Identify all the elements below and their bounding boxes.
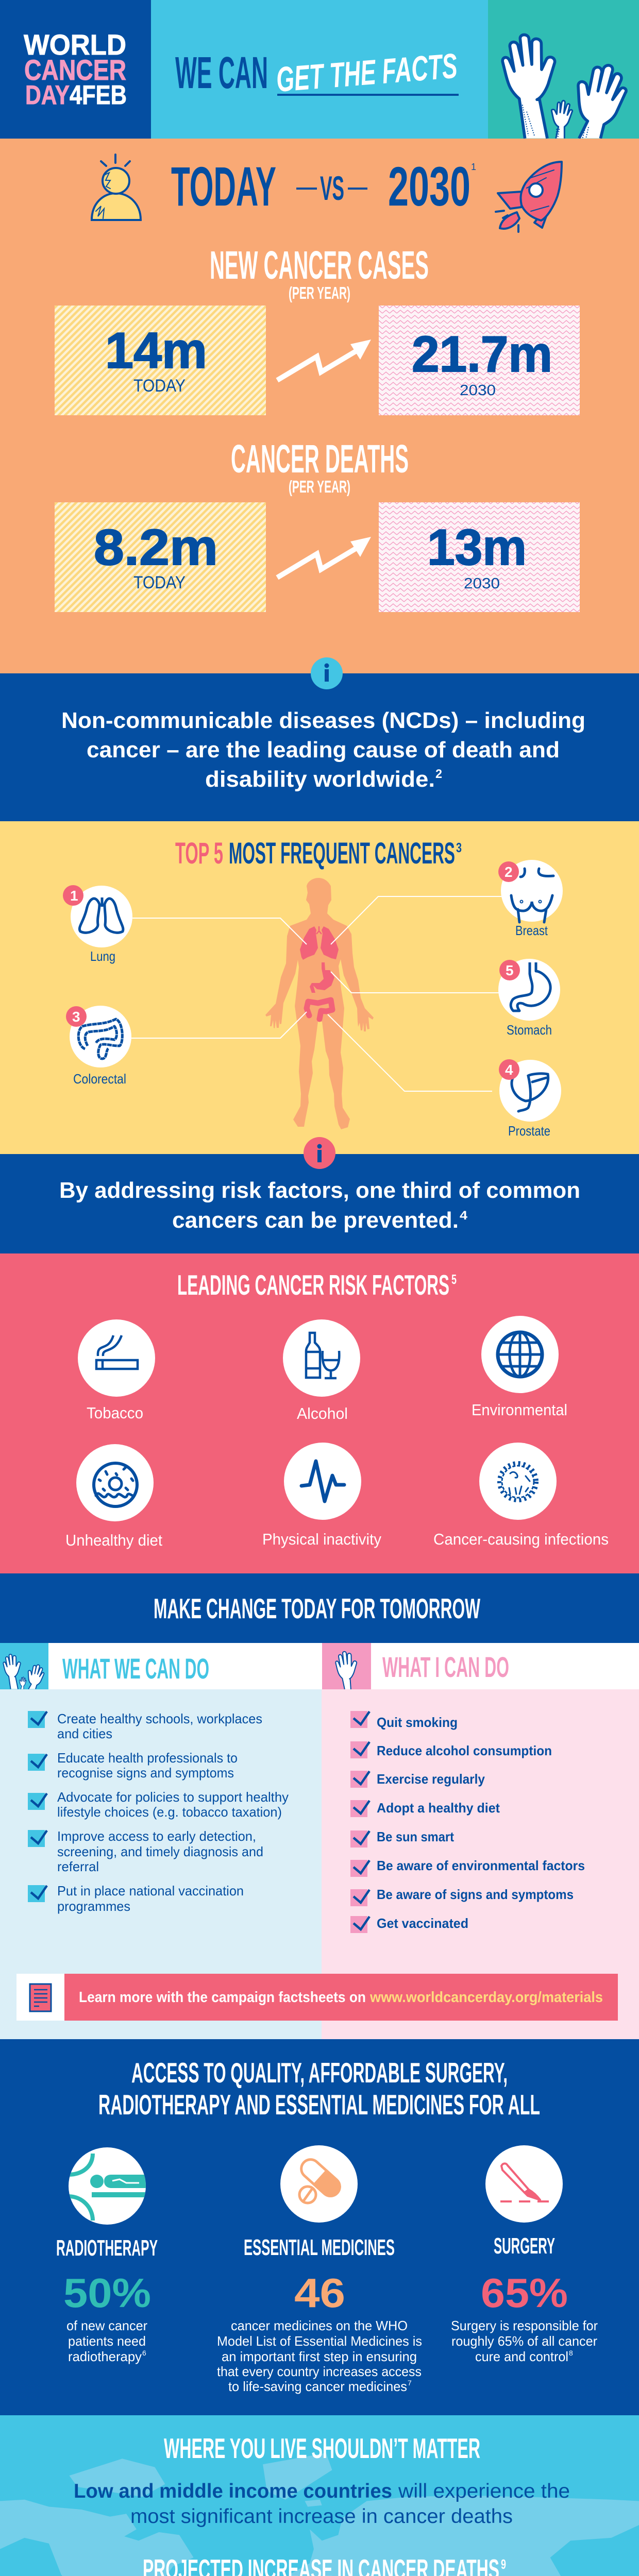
checklist: what I can do: Quit smoking	[377, 1715, 458, 1730]
item: colorectal: Colorectal	[73, 1071, 126, 1087]
icon: hand	[335, 1652, 357, 1689]
stat box: 13m 2030	[379, 502, 580, 612]
item: stomach: 5	[506, 962, 514, 978]
checklist: what we can do: recognise signs and symptoms	[57, 1765, 234, 1781]
stat box: 14m today: TODAY	[133, 376, 186, 396]
stat box: 21.7m 2030	[379, 306, 580, 415]
icon: person	[92, 155, 141, 220]
heading: today vs 2030: VS	[320, 169, 344, 207]
item: unhealthy diet: Unhealthy diet	[65, 1531, 162, 1549]
checklist: what we can do: Improve access to early detection,	[57, 1828, 256, 1844]
column: essential medicines: Model List of Essential Medicines is	[217, 2333, 422, 2349]
heading: new cancer cases: (PER YEAR)	[289, 283, 350, 302]
item: lung: 1	[70, 888, 78, 904]
icon: hands	[3, 1654, 44, 1689]
campaign slogan: GET THE FACTS	[275, 46, 459, 99]
column: surgery: 65%	[481, 2270, 568, 2316]
text: low and middle income countries: will experience the	[398, 2480, 570, 2502]
checklist: what I can do: Be aware of environmental factors	[377, 1858, 585, 1873]
item: environmental: Environmental	[472, 1401, 567, 1419]
panel: make change heading	[0, 1573, 639, 1643]
header banner	[0, 0, 639, 139]
heading: risk factors: 5	[451, 1272, 457, 1287]
panel: World Cancer Day logo: 4FEB	[70, 80, 127, 110]
column: essential medicines: ESSENTIAL MEDICINES	[244, 2235, 395, 2260]
column: radiotherapy: radiotherapy	[68, 2349, 142, 2364]
text: NCD statement: 2	[435, 767, 442, 781]
checklist: what we can do	[28, 1711, 289, 1914]
heading: access	[98, 2057, 540, 2121]
stat box: 13m 2030: 2030	[464, 575, 500, 592]
text: NCD statement: disability worldwide.	[205, 767, 435, 792]
arrow: cases rising	[277, 340, 371, 380]
item: colorectal	[66, 1006, 131, 1087]
checklist: what I can do: Exercise regularly	[377, 1771, 485, 1787]
column: surgery: 8	[569, 2349, 573, 2357]
column: radiotherapy: patients need	[68, 2333, 146, 2349]
heading: new cancer cases: NEW CANCER CASES	[210, 243, 429, 287]
body silhouette with organs	[131, 878, 501, 1129]
checklist: what I can do: Be sun smart	[377, 1829, 454, 1844]
stat box: 13m 2030: 13m	[427, 519, 527, 575]
item: stomach: Stomach	[507, 1022, 552, 1038]
column: surgery: cure and control	[475, 2349, 568, 2364]
item: prostate: 4	[505, 1062, 513, 1078]
campaign slogan	[175, 46, 459, 99]
heading: what I can do: WHAT I CAN DO	[382, 1651, 509, 1683]
icon: info	[311, 657, 343, 689]
arrow: deaths rising	[277, 537, 371, 578]
text: prevention statement: cancers can be prevented.	[172, 1208, 459, 1233]
campaign slogan: WE CAN	[175, 48, 268, 98]
checklist: what we can do: screening, and timely diagnosis and	[57, 1844, 263, 1859]
heading: what we can do: WHAT WE CAN DO	[62, 1652, 209, 1685]
checklist: what I can do: Reduce alcohol consumption	[377, 1743, 552, 1758]
column: essential medicines: that every country increases access	[217, 2364, 422, 2379]
heading: risk factors	[177, 1269, 457, 1301]
heading: top 5 most frequent cancers: MOST FREQUENT CANCERS	[229, 837, 455, 870]
column: essential medicines: to life-saving cancer medicines	[228, 2379, 407, 2394]
column: surgery	[451, 2145, 598, 2364]
text: low and middle income countries: most significant increase in cancer deaths	[130, 2505, 513, 2528]
panel: NCD fact	[0, 657, 639, 821]
stat box: 8.2m today: 8.2m	[94, 519, 218, 575]
panel: access to treatment	[0, 2039, 639, 2415]
panel: top 5 cancers	[0, 821, 639, 1154]
heading: today vs 2030	[171, 155, 476, 217]
item: physical inactivity: Physical inactivity	[262, 1530, 381, 1548]
checklist: what we can do: Create healthy schools, workplaces	[57, 1711, 262, 1726]
text: low and middle income countries: Low and middle income countries	[74, 2480, 392, 2502]
column: radiotherapy: of new cancer	[66, 2318, 147, 2333]
checklist: what I can do: Get vaccinated	[377, 1916, 468, 1931]
panel: World Cancer Day logo: WORLD	[24, 28, 126, 61]
callout: campaign factsheets: www.worldcancerday.org/materials	[369, 1989, 603, 2006]
panel: World Cancer Day logo: DAY	[25, 80, 70, 110]
column: surgery: SURGERY	[494, 2233, 555, 2259]
heading: today vs 2030: 1	[471, 162, 476, 172]
stat box: 21.7m 2030: 2030	[460, 382, 496, 399]
checklist: what we can do: lifestyle choices (e.g. tobacco taxation)	[57, 1804, 282, 1820]
column: radiotherapy: 50%	[63, 2270, 151, 2316]
item: alcohol: Alcohol	[297, 1404, 348, 1422]
panel: today vs 2030	[0, 139, 639, 673]
text: prevention statement	[59, 1178, 580, 1233]
item: alcohol	[283, 1319, 360, 1422]
heading: cancer deaths	[231, 437, 409, 496]
heading: today vs 2030: TODAY	[171, 155, 276, 217]
checklist: what we can do: Advocate for policies to support healthy	[57, 1789, 289, 1805]
heading: cancer deaths: CANCER DEATHS	[231, 437, 409, 481]
text: prevention statement: 4	[460, 1209, 468, 1223]
stat box: 8.2m today	[55, 502, 266, 612]
panel: raised hands illustration	[488, 0, 639, 139]
item: lung	[63, 885, 132, 964]
text: NCD statement	[61, 708, 585, 792]
column: essential medicines: an important first step in ensuring	[222, 2349, 417, 2364]
icon: document	[30, 1984, 51, 2011]
checklist: what I can do	[350, 1711, 585, 1933]
icon: info pink	[304, 1137, 335, 1169]
column: essential medicines: cancer medicines on the WHO	[231, 2318, 408, 2333]
column: radiotherapy: 6	[142, 2349, 146, 2357]
heading: today vs 2030: 2030	[388, 155, 470, 217]
text: prevention statement: By addressing risk factors, one third of common	[59, 1178, 580, 1203]
checklist: what we can do: Educate health professionals to	[57, 1750, 238, 1766]
item: lung: Lung	[90, 948, 115, 964]
item: physical inactivity	[262, 1443, 381, 1548]
heading: new cancer cases	[210, 243, 429, 302]
item: stomach	[498, 959, 560, 1038]
heading: top 5 most frequent cancers: 3	[456, 840, 462, 855]
callout: campaign factsheets: Learn more with the campaign factsheets on	[79, 1989, 366, 2006]
stat box: 8.2m today: TODAY	[133, 573, 186, 592]
item: tobacco	[78, 1319, 155, 1422]
callout: campaign factsheets	[16, 1974, 618, 2021]
panel: prevention fact	[0, 1137, 639, 1253]
column: surgery: roughly 65% of all cancer	[451, 2333, 597, 2349]
stat box: 14m today: 14m	[105, 322, 207, 379]
panel: leading risk factors	[0, 1253, 639, 1573]
item: cancer-causing infections: Cancer-causing infections	[433, 1530, 609, 1548]
checklist: what we can do: referral	[57, 1859, 99, 1874]
heading: projected increase: 9	[501, 2556, 506, 2572]
checklist: what we can do: Put in place national vaccination	[57, 1883, 244, 1899]
item: tobacco: Tobacco	[87, 1404, 143, 1422]
column: essential medicines	[217, 2145, 422, 2394]
column: surgery: Surgery is responsible for	[451, 2318, 598, 2333]
text: NCD statement: cancer – are the leading cause of death and	[87, 737, 560, 762]
item: breast: 2	[505, 864, 513, 880]
panel: what we can do	[0, 1643, 322, 2039]
heading: top 5 most frequent cancers: TOP 5	[175, 837, 223, 870]
item: cancer-causing infections	[433, 1443, 609, 1548]
heading: risk factors: LEADING CANCER RISK FACTORS	[177, 1269, 449, 1301]
heading: cancer deaths: (PER YEAR)	[289, 477, 350, 496]
column: essential medicines: 7	[408, 2379, 412, 2387]
text: low and middle income countries	[74, 2480, 570, 2528]
panel: World Cancer Day logo: CANCER	[24, 54, 126, 86]
checklist: what we can do: and cities	[57, 1726, 112, 1741]
panel: what I can do	[322, 1643, 639, 2039]
item: colorectal: 3	[72, 1009, 80, 1025]
item: breast: Breast	[515, 923, 548, 938]
stat box: 14m today	[55, 306, 266, 415]
text: NCD statement: Non-communicable diseases (NCDs) – including	[61, 708, 585, 733]
panel: World Cancer Day logo	[0, 0, 151, 139]
stat box: 21.7m 2030: 21.7m	[412, 326, 552, 382]
world map background	[0, 2453, 639, 2576]
item: prostate	[499, 1059, 561, 1139]
column: essential medicines: 46	[294, 2270, 345, 2316]
heading: top 5 most frequent cancers	[175, 837, 462, 870]
checklist: what I can do: Be aware of signs and symptoms	[377, 1887, 574, 1902]
checklist: what we can do: programmes	[57, 1899, 130, 1914]
icon: rocket	[496, 162, 562, 232]
item: breast	[498, 860, 563, 938]
panel: where you live	[0, 2415, 639, 2576]
item: unhealthy diet	[65, 1444, 162, 1549]
checklist: what I can do: Adopt a healthy diet	[377, 1800, 500, 1816]
item: environmental	[472, 1316, 567, 1419]
item: prostate: Prostate	[508, 1123, 550, 1139]
column: radiotherapy: RADIOTHERAPY	[56, 2235, 158, 2261]
column: radiotherapy	[56, 2147, 158, 2364]
